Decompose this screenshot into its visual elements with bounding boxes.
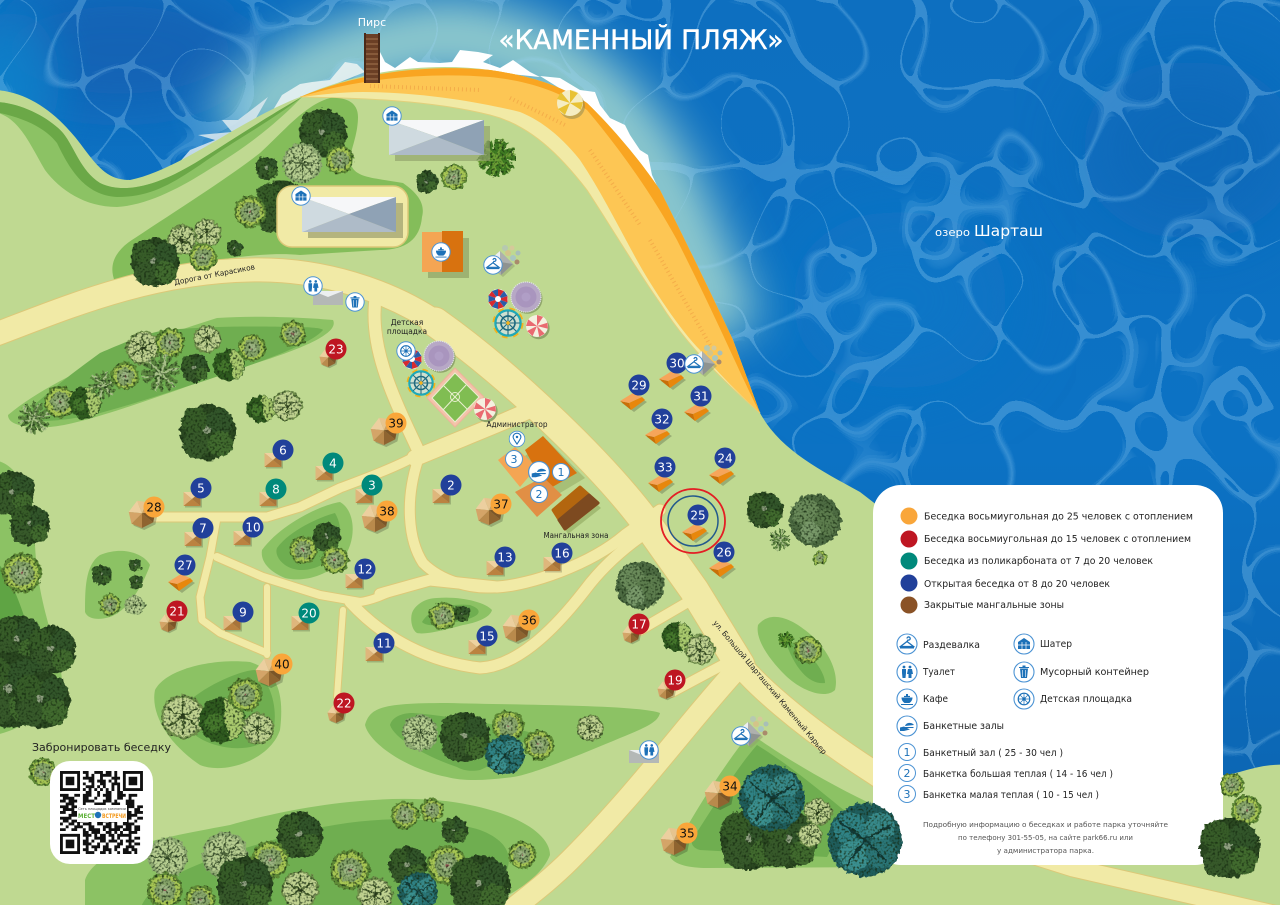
gazebo 40: 40 — [274, 658, 290, 672]
gazebo 35: 35 — [679, 826, 695, 840]
legend: facility icons: Раздевалка — [923, 640, 980, 651]
gazebo 12: 12 — [357, 562, 373, 576]
gazebo 9 — [224, 602, 254, 632]
banquet hall numbers: 3 — [510, 453, 518, 466]
gazebo 5: 5 — [197, 482, 205, 496]
gazebo 21: 21 — [169, 604, 185, 618]
gazebo 24 — [709, 448, 736, 486]
map labels: Администратор — [486, 420, 548, 429]
map labels: ул. Большой Шарташский Каменный Карьер — [711, 619, 829, 756]
legend: facility icons: Кафе — [923, 694, 948, 705]
gazebo 25: 25 — [690, 508, 706, 522]
legend: facility icons: Туалет — [922, 667, 955, 678]
gazebo 26 — [709, 542, 736, 579]
gazebo 13: 13 — [497, 550, 513, 564]
gazebo 32: 32 — [654, 412, 670, 426]
gazebo 24: 24 — [717, 452, 733, 466]
gazebo 23 — [319, 338, 346, 368]
gazebo 15: 15 — [479, 630, 495, 644]
coastal green belt — [0, 97, 423, 282]
gazebo 8: 8 — [272, 482, 280, 496]
gazebo 30 — [659, 352, 688, 390]
cafe building — [422, 231, 469, 278]
gazebo 2 — [432, 474, 462, 504]
legend: gazebo colour keys: Закрытые мангальные зоны — [924, 600, 1064, 611]
gazebo 26: 26 — [716, 546, 732, 560]
gazebo 40 — [256, 654, 292, 688]
gazebo 39 — [371, 412, 406, 447]
gazebo 33 — [648, 456, 676, 494]
gazebo 13 — [486, 546, 516, 576]
gazebo 36: 36 — [521, 614, 537, 628]
legend: facility icons — [897, 634, 1149, 736]
gazebo 31 — [684, 386, 712, 423]
gazebo 21 — [159, 600, 188, 633]
gazebo 32 — [645, 408, 672, 446]
gazebo 29 — [620, 374, 650, 412]
legend: facility icons: Шатер — [1040, 639, 1072, 650]
legend: gazebo colour keys: Беседка из поликарбоната от 7 до 20 человек — [924, 556, 1153, 567]
banquet hall numbers — [506, 450, 570, 502]
gazebo 4: 4 — [329, 456, 337, 470]
sand pad and lower tent pavilion — [277, 186, 408, 247]
legend: banquet hall list: 3 — [904, 788, 910, 801]
legend: footnote: у администратора парка. — [997, 847, 1094, 855]
gazebo 38 — [362, 500, 398, 534]
gazebo 34 — [705, 776, 740, 810]
gazebo 16 — [544, 542, 572, 572]
gazebo 3 — [356, 474, 382, 504]
map labels: озеро — [935, 226, 970, 239]
map labels — [173, 16, 1043, 756]
gazebo 33: 33 — [657, 460, 673, 474]
gazebo 20: 20 — [301, 606, 317, 620]
park roads — [0, 270, 1280, 905]
gazebo 38: 38 — [379, 504, 395, 518]
gazebo 5 — [184, 478, 212, 508]
map icons — [292, 107, 750, 759]
gazebo 7 — [184, 518, 214, 548]
beach umbrella — [557, 90, 585, 119]
gazebo 8 — [260, 478, 286, 508]
legend: facility icons: Детская площадка — [1040, 694, 1132, 705]
QR centre logo: Сеть площадок компании — [78, 807, 126, 811]
legend: banquet hall list: Банкетка большая теплая ( 14 - 16 чел ) — [923, 769, 1113, 780]
map labels: Шарташ — [974, 222, 1043, 240]
gazebo 22: 22 — [336, 696, 352, 710]
map labels: Пирс — [358, 16, 386, 29]
gazebo 9: 9 — [239, 606, 247, 620]
legend: facility icons: Мусорный контейнер — [1040, 667, 1149, 678]
legend: gazebo colour keys: Беседка восьмиугольная до 25 человек с отоплением — [924, 512, 1193, 522]
gazebo 37: 37 — [493, 498, 509, 512]
QR centre logo — [77, 805, 127, 822]
gazebo 19: 19 — [667, 674, 683, 688]
booking label: Забронировать беседку — [32, 741, 171, 754]
legend: facility icons: Банкетные залы — [923, 721, 1004, 732]
banquet hall numbers: 2 — [536, 488, 542, 501]
highlighted gazebo rings — [661, 489, 725, 553]
legend: footnote: по телефону 301-55-05, на сайте park66.ru или — [958, 834, 1133, 842]
QR centre logo: ВСТРЕЧИ — [102, 813, 126, 820]
gazebo 22 — [327, 692, 354, 724]
banquet hall numbers: 1 — [558, 466, 564, 479]
legend panel — [873, 485, 1223, 865]
trees — [0, 109, 841, 905]
gazebo 7: 7 — [199, 522, 207, 536]
gazebo 28 — [129, 496, 164, 530]
barbecue zone — [553, 487, 601, 534]
gazebo 25 — [682, 504, 709, 543]
gazebo 2: 2 — [447, 478, 455, 492]
gazebo 28: 28 — [146, 500, 162, 514]
gazebo 36 — [503, 610, 540, 644]
title: «КАМЕННЫЙ ПЛЯЖ» — [498, 24, 784, 56]
legend: footnote: Подробную информацию о беседках и работе парка уточняйте — [923, 821, 1168, 829]
gazebo 23: 23 — [328, 342, 344, 356]
legend: gazebo colour keys: Открытая беседка от 8 до 20 человек — [924, 579, 1110, 590]
map labels: Детская — [391, 318, 423, 327]
gazebo 31: 31 — [693, 390, 709, 404]
gazebo 10 — [234, 516, 264, 546]
gazebo 10: 10 — [245, 520, 261, 534]
gazebo 6 — [264, 440, 294, 468]
gazebo 37 — [476, 494, 512, 527]
upper tent pavilion — [389, 120, 490, 161]
trees over the panel corners — [828, 773, 1261, 878]
legend: banquet hall list: 2 — [904, 767, 910, 780]
legend: banquet hall list: 1 — [904, 746, 910, 759]
upper playground equipment — [488, 282, 550, 339]
gazebo 29: 29 — [631, 378, 647, 392]
gazebo 15 — [468, 626, 498, 656]
pier — [364, 33, 380, 83]
children playground with football field — [402, 341, 498, 427]
map labels: площадка — [387, 327, 427, 336]
gazebo 27 — [168, 554, 196, 593]
gazebo 34: 34 — [722, 780, 738, 794]
gazebo 12 — [346, 558, 376, 590]
map labels: Мангальная зона — [544, 531, 608, 540]
green patch by gazebos 34 and 35 — [670, 733, 890, 868]
legend: footnote — [923, 821, 1168, 855]
legend: gazebo colour keys: Беседка восьмиугольная до 15 человек с отоплением — [924, 534, 1191, 545]
legend: banquet hall list — [898, 744, 1113, 802]
gazebo 35 — [661, 822, 698, 857]
gazebo 11 — [366, 632, 394, 662]
gazebo 17 — [622, 614, 650, 644]
grey service huts — [313, 245, 768, 763]
gazebo 4 — [316, 452, 344, 482]
gazebo 30: 30 — [669, 356, 685, 370]
gazebo 16: 16 — [554, 546, 570, 560]
sea foam along the shore — [177, 50, 660, 192]
gazebo 3: 3 — [368, 478, 376, 492]
legend: banquet hall list: Банкетка малая теплая ( 10 - 15 чел ) — [923, 790, 1099, 801]
gazebo 11: 11 — [376, 636, 392, 650]
vegetation patches — [0, 317, 836, 905]
gazebo 6: 6 — [279, 444, 287, 458]
gazebo 20 — [292, 602, 320, 632]
legend: banquet hall list: Банкетный зал ( 25 - 30 чел ) — [923, 748, 1063, 759]
gazebo 19 — [657, 670, 686, 700]
map labels: Дорога от Карасиков — [173, 262, 256, 287]
gazebo 39: 39 — [388, 416, 404, 430]
gazebo 17: 17 — [631, 618, 647, 632]
beach — [300, 68, 760, 413]
legend: gazebo colour keys — [900, 508, 1193, 614]
QR centre logo: МЕСТ — [78, 813, 96, 820]
banquet halls — [498, 436, 585, 517]
gazebo 27: 27 — [177, 558, 193, 572]
QR code — [50, 761, 153, 864]
